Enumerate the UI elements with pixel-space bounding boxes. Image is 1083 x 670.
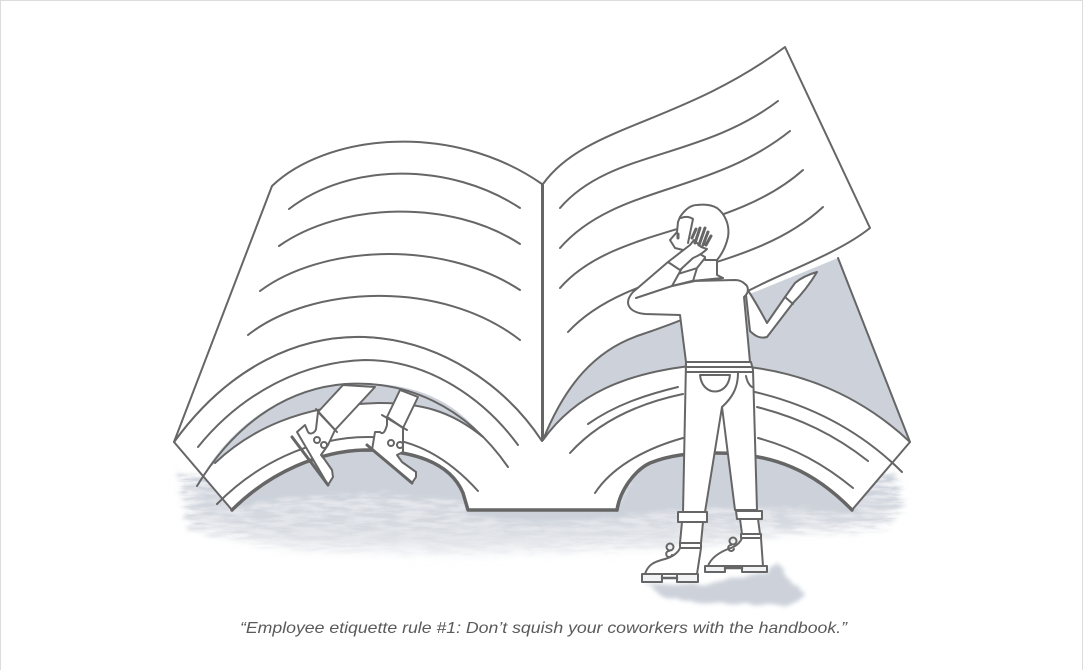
left leg [318, 385, 375, 430]
right leg [387, 390, 418, 428]
neck and collar [693, 258, 723, 281]
right page text lines [560, 101, 823, 332]
left block arcs [174, 337, 617, 510]
right shoe [367, 415, 416, 483]
torso and raised arm [628, 262, 750, 362]
book [174, 47, 910, 510]
squished coworker's legs [292, 385, 418, 485]
right boot [705, 511, 767, 572]
left page text lines [248, 174, 520, 340]
person holding the page [628, 205, 817, 582]
right block arcs [543, 258, 910, 510]
head [670, 205, 728, 260]
ground shadow [178, 440, 906, 606]
right arm [745, 272, 817, 338]
grey band under left page [205, 383, 483, 472]
legs [683, 362, 757, 513]
left shoe [292, 409, 337, 485]
left page [174, 142, 542, 442]
page block [174, 337, 910, 510]
pockets [700, 375, 730, 392]
left boot [642, 512, 707, 582]
right page, curled [543, 47, 870, 440]
caption: “Employee etiquette rule #1: Don’t squish your coworkers with the handbook.” [240, 620, 848, 637]
hand on head [668, 240, 707, 270]
grey behind right page [543, 258, 910, 442]
